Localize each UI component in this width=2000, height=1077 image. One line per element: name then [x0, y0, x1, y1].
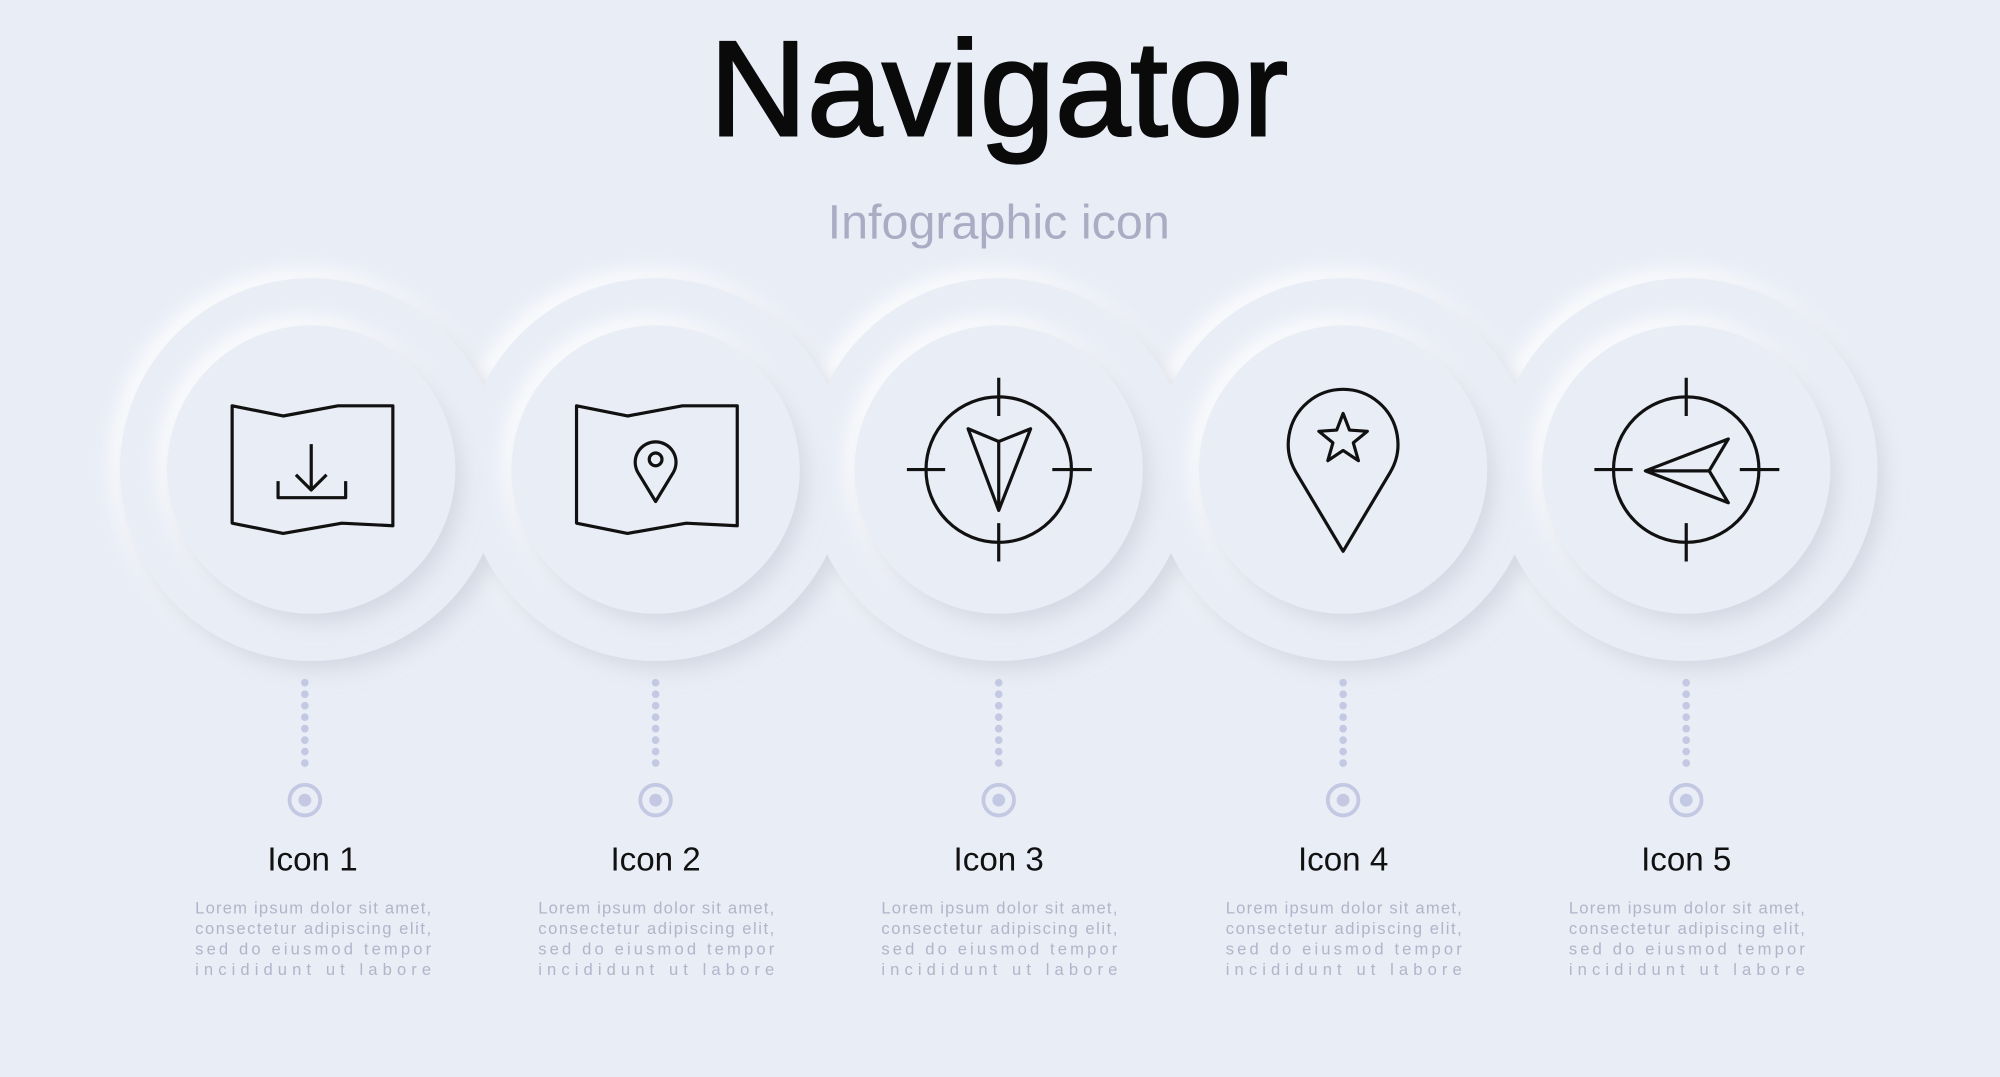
descriptions: Lorem ipsum dolor sit amet,	[195, 899, 431, 918]
icon: compass left	[1594, 378, 1779, 561]
labels: Icon 4	[1298, 841, 1388, 878]
descriptions: consectetur adipiscing elit,	[538, 919, 774, 938]
descriptions: sed do eiusmod tempor	[538, 939, 775, 958]
descriptions: Lorem ipsum dolor sit amet,	[881, 899, 1117, 918]
connectors	[305, 683, 1686, 773]
subtitle: Infographic icon	[828, 196, 1170, 250]
labels: Icon 5	[1641, 841, 1731, 878]
descriptions: consectetur adipiscing elit,	[195, 919, 431, 938]
icon: map download	[232, 406, 393, 533]
descriptions: Lorem ipsum dolor sit amet,	[1226, 899, 1462, 918]
title: Navigator	[709, 13, 1288, 164]
descriptions: sed do eiusmod tempor	[195, 939, 432, 958]
descriptions: sed do eiusmod tempor	[1226, 939, 1462, 958]
icon: pin star	[1288, 389, 1398, 551]
panel: inner circles	[167, 325, 1830, 614]
descriptions	[195, 899, 1805, 979]
descriptions: sed do eiusmod tempor	[1569, 939, 1805, 958]
descriptions: incididunt ut labore	[195, 960, 431, 979]
descriptions: incididunt ut labore	[881, 960, 1117, 979]
descriptions: consectetur adipiscing elit,	[1569, 919, 1805, 938]
descriptions: incididunt ut labore	[1226, 960, 1462, 979]
panel: outer rings	[120, 278, 1878, 661]
descriptions: incididunt ut labore	[1569, 960, 1805, 979]
icon: compass down	[907, 378, 1092, 561]
markers	[290, 785, 1702, 815]
labels: Icon 1	[267, 841, 358, 878]
icon: map pin	[577, 406, 737, 533]
descriptions: Lorem ipsum dolor sit amet,	[538, 899, 774, 918]
labels: Icon 2	[610, 841, 701, 878]
descriptions: Lorem ipsum dolor sit amet,	[1569, 899, 1805, 918]
labels	[267, 841, 1731, 878]
descriptions: sed do eiusmod tempor	[881, 939, 1118, 958]
descriptions: incididunt ut labore	[538, 960, 774, 979]
descriptions: consectetur adipiscing elit,	[1226, 919, 1462, 938]
descriptions: consectetur adipiscing elit,	[881, 919, 1117, 938]
labels: Icon 3	[954, 841, 1044, 878]
